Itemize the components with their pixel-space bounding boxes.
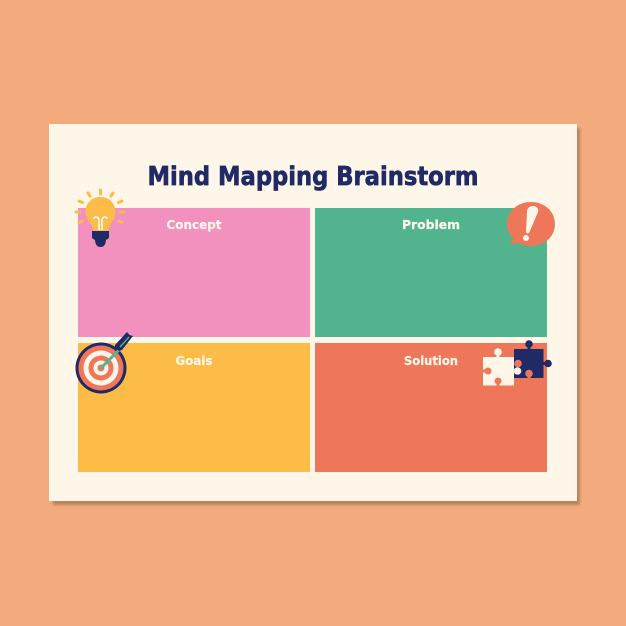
icon: exclamation speech bubble bbox=[507, 202, 555, 246]
icon: light bulb bbox=[76, 190, 124, 247]
heading: concept: Concept bbox=[166, 217, 222, 232]
panel: concept bbox=[78, 208, 310, 337]
puzzle piece: cream bbox=[482, 348, 514, 386]
card shadow bbox=[53, 128, 580, 505]
icon: target with arrow bbox=[76, 332, 133, 394]
panel: solution bbox=[315, 343, 547, 472]
icon: puzzle pieces bbox=[482, 340, 552, 386]
panel: problem bbox=[315, 208, 547, 337]
title: Mind Mapping Brainstorm bbox=[148, 162, 478, 192]
heading: problem: Problem bbox=[402, 217, 460, 232]
puzzle piece: navy bbox=[514, 340, 552, 379]
card bbox=[49, 124, 577, 501]
heading: goals: Goals bbox=[176, 353, 212, 368]
heading: solution: Solution bbox=[404, 353, 458, 368]
panel: goals bbox=[78, 343, 310, 472]
